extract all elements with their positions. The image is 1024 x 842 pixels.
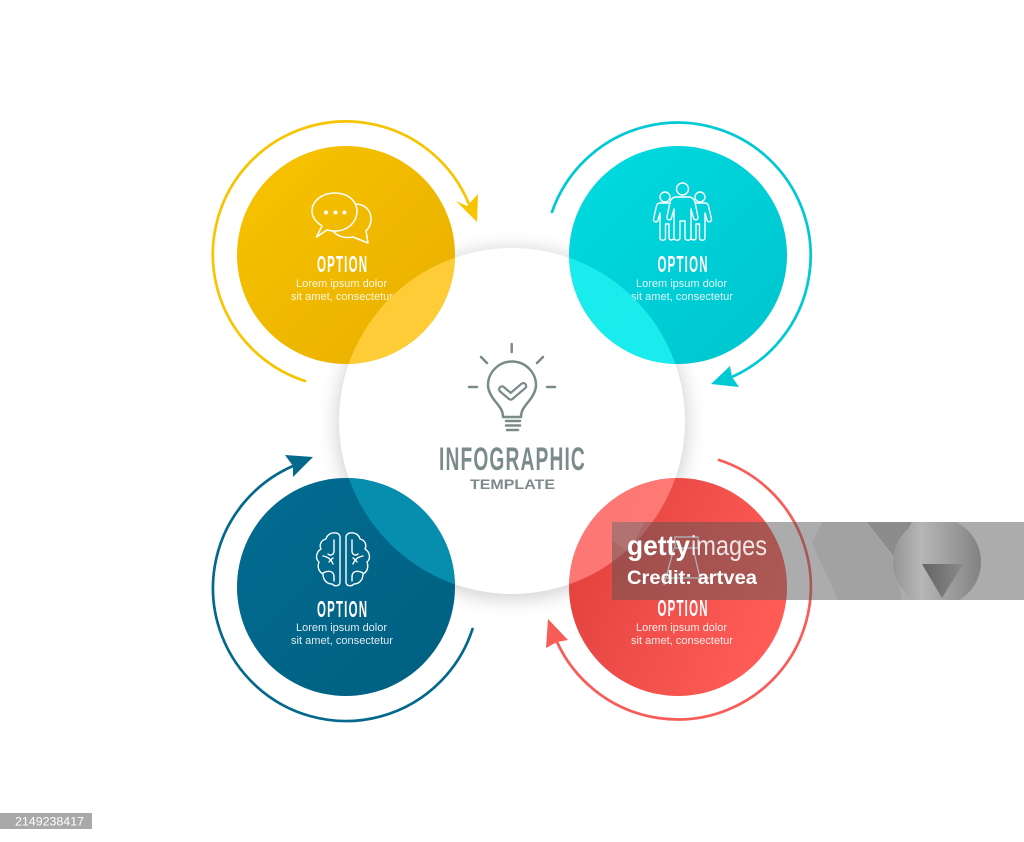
arrow: navy clockwise arc [213, 455, 472, 721]
text block: lorem: sit amet, consectetur [631, 291, 733, 303]
text block: lorem: sit amet, consectetur [291, 291, 393, 303]
icon: three people [653, 183, 712, 240]
watermark text: credit: Credit: artvea [627, 567, 757, 589]
watermark band [612, 522, 1024, 600]
overlap with central circle [348, 258, 455, 364]
text block: lorem: Lorem ipsum dolor [296, 278, 387, 290]
overlap with central circle [348, 478, 455, 584]
icon: faint figure behind watermark [663, 537, 710, 585]
watermark text: getty: getty [627, 530, 690, 561]
heading: option: OPTION [317, 252, 367, 277]
heading: option: OPTION [658, 252, 708, 277]
panel: cyan option [552, 123, 811, 387]
panel: yellow option [213, 121, 478, 381]
image id label [0, 813, 92, 829]
watermark text: images: images [691, 530, 767, 561]
arrow: red clockwise arc [546, 460, 811, 719]
text block: lorem: Lorem ipsum dolor [296, 622, 387, 634]
text block: lorem [291, 278, 393, 303]
arrow: yellow clockwise arc [213, 121, 478, 381]
text block: lorem [631, 278, 733, 303]
text block: lorem: sit amet, consectetur [291, 635, 393, 647]
text block: lorem: Lorem ipsum dolor [636, 278, 727, 290]
text block: lorem [631, 622, 733, 647]
text block: lorem [291, 622, 393, 647]
text block: lorem: sit amet, consectetur [631, 635, 733, 647]
overlap with central circle [569, 258, 676, 364]
text block: lorem: Lorem ipsum dolor [636, 622, 727, 634]
image id label: 2149238417 [15, 814, 84, 828]
icon: light bulb with check [469, 344, 555, 430]
subtitle: template: TEMPLATE [470, 476, 555, 492]
panel: navy option [213, 455, 472, 721]
panel: central circle [338, 248, 686, 598]
heading: option: OPTION [317, 597, 367, 622]
panel: red option [546, 460, 811, 719]
heading: option: OPTION [658, 596, 708, 621]
icon: brain [317, 533, 369, 586]
arrow: cyan clockwise arc [552, 123, 811, 387]
overlap with central circle [569, 478, 676, 584]
title: infographic: INFOGRAPHIC [439, 441, 585, 477]
icon: chat bubbles [312, 193, 371, 243]
